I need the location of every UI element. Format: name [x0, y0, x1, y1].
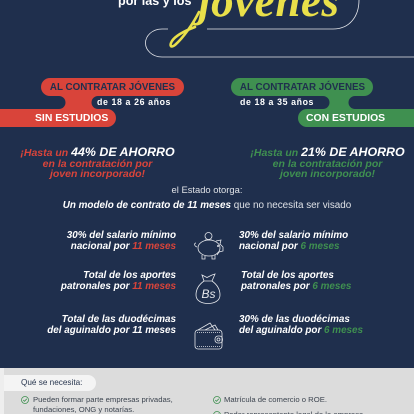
- right benefit: salary: [239, 230, 348, 252]
- panel: green header: [231, 78, 414, 127]
- right benefit: contributions: [240, 270, 351, 292]
- panel: green header: de 18 a 35 años: [240, 97, 314, 107]
- right benefit: contributions: patronales por 6 meses: [241, 281, 351, 292]
- left benefit: contributions: Total de los aportes: [83, 270, 176, 281]
- panel: red header: de 18 a 26 años: [97, 97, 171, 107]
- left benefit: contributions: patronales por 11 meses: [61, 281, 176, 292]
- panel: red header: SIN ESTUDIOS: [35, 113, 108, 124]
- title: [118, 0, 340, 48]
- savings text: green: en la contratación por: [273, 158, 382, 170]
- requirement item: eligible entities: Pueden formar parte empresas privadas,: [33, 395, 173, 404]
- requirements heading: Qué se necesita:: [21, 378, 82, 387]
- contract model line: Un modelo de contrato de 11 meses que no necesita ser visado: [63, 200, 351, 211]
- icon: piggy bank: [194, 232, 224, 260]
- panel: green header: AL CONTRATAR JÓVENES: [240, 82, 365, 93]
- icon: money bag: Bs: [202, 287, 216, 301]
- panel: green header: CON ESTUDIOS: [306, 113, 385, 124]
- panel: red header: [0, 78, 184, 127]
- requirement item: eligible entities: [21, 395, 173, 414]
- savings text: red: joven incorporado!: [50, 168, 145, 180]
- requirement item: eligible entities: fundaciones, ONG y notarías.: [33, 405, 134, 414]
- state grants label: el Estado otorga:: [172, 184, 242, 195]
- left benefit: bonus: del aguinaldo por 11 meses: [47, 325, 176, 336]
- right benefit: salary: 30% del salario mínimo: [239, 230, 348, 241]
- right benefit: contributions: Total de los aportes: [241, 270, 334, 281]
- icon: money bag: [196, 273, 220, 304]
- left benefit: contributions: [60, 270, 176, 292]
- title outline: [145, 0, 414, 58]
- left benefit: salary: nacional por 11 meses: [71, 241, 176, 252]
- left benefit: salary: 30% del salario mínimo: [67, 230, 176, 241]
- requirements heading: [4, 375, 96, 391]
- savings text: green: ¡Hasta un 21% DE AHORRO: [250, 145, 405, 159]
- requirement item: registration: Matrícula de comercio o ROE.: [224, 395, 327, 404]
- savings text: red: [20, 145, 175, 180]
- savings text: red: ¡Hasta un 44% DE AHORRO: [20, 145, 175, 159]
- right benefit: salary: nacional por 6 meses: [239, 241, 339, 252]
- left benefit: bonus: [47, 314, 176, 336]
- left benefit: salary: [66, 230, 176, 252]
- panel: requirements: [0, 368, 414, 414]
- requirements side stripe: [0, 368, 4, 414]
- left benefit: bonus: Total de las duodécimas: [62, 314, 176, 325]
- panel: red header: AL CONTRATAR JÓVENES: [50, 82, 175, 93]
- right benefit: bonus: 30% de las duodécimas: [239, 314, 350, 325]
- savings text: red: en la contratación por: [43, 158, 152, 170]
- savings text: green: [250, 145, 405, 180]
- right benefit: bonus: [239, 314, 363, 336]
- right benefit: bonus: del aguinaldo por 6 meses: [239, 325, 363, 336]
- icon: wallet: [194, 322, 223, 350]
- savings text: green: joven incorporado!: [280, 168, 375, 180]
